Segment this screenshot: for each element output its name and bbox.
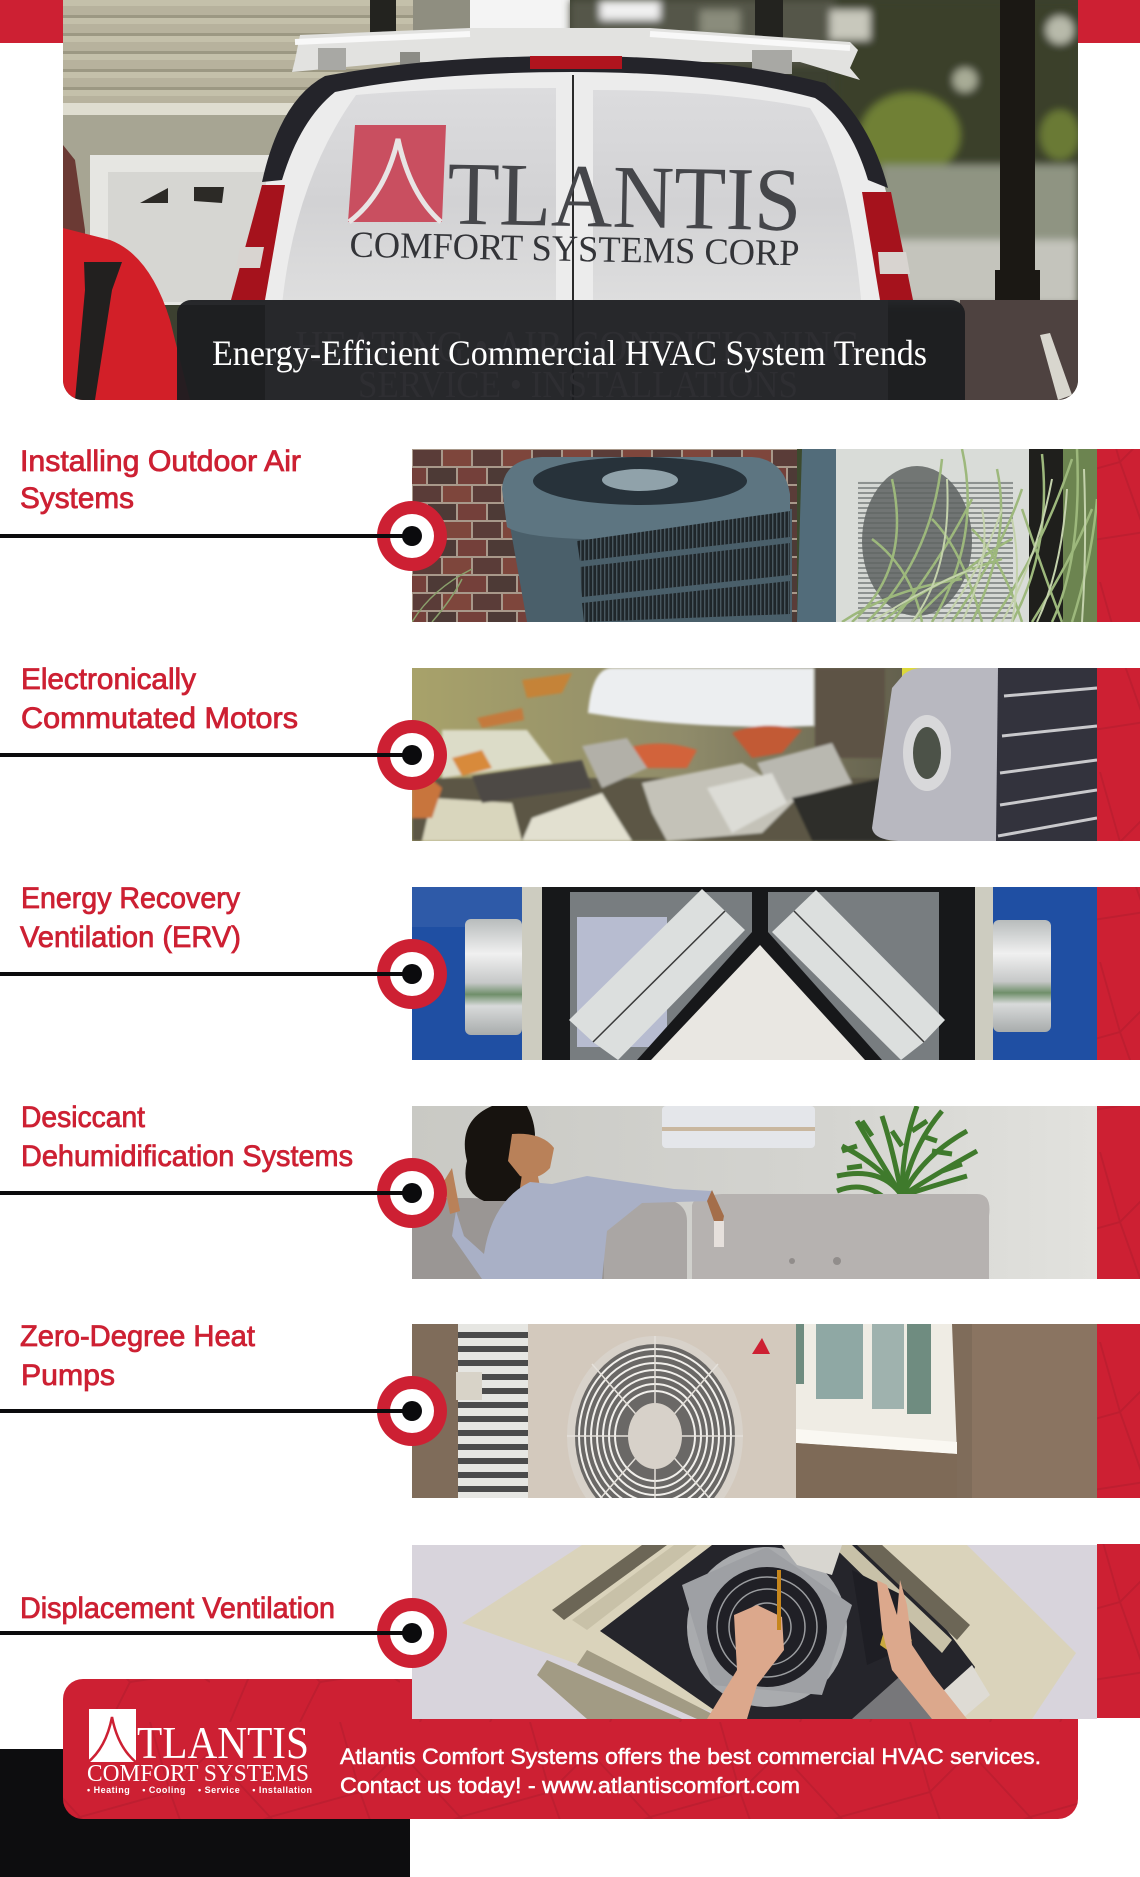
photo: ceiling cassette displacement ventilation	[412, 1545, 1097, 1719]
row 3 heading: Energy Recovery	[21, 882, 240, 915]
corner block: top right	[1078, 0, 1140, 43]
footer panel	[63, 1679, 1078, 1819]
photo: energy recovery ventilator	[412, 887, 1097, 1060]
row 3 connector and target	[0, 939, 447, 1009]
van lettering: TLANTIS	[447, 145, 802, 250]
woman	[444, 1106, 724, 1279]
row 4 heading	[21, 1101, 353, 1173]
title bar: SERVICE • INSTALLATIONS	[358, 364, 798, 406]
corner block: top left	[0, 0, 63, 43]
row 1 heading: Systems	[20, 482, 134, 515]
row 2 heading: Commutated Motors	[21, 702, 298, 735]
title bar: HEATING • AIR CONDITIONING	[295, 322, 860, 371]
row 6 connector and target	[0, 1598, 447, 1668]
van lettering	[351, 164, 798, 266]
red side strip: row 6	[1097, 1544, 1140, 1718]
row 4 connector and target	[0, 1158, 447, 1228]
footer message: Contact us today! - www.atlantiscomfort.com	[340, 1773, 800, 1798]
footer logo	[87, 1709, 312, 1795]
row 1 heading: Installing Outdoor Air	[20, 445, 301, 478]
fan grille	[567, 1336, 743, 1536]
row 2 connector and target	[0, 720, 447, 790]
row 6 heading: Displacement Ventilation	[20, 1592, 335, 1625]
footer black block	[0, 1749, 410, 1877]
footer message: Atlantis Comfort Systems offers the best commercial HVAC services.	[340, 1744, 1041, 1769]
row 3 heading	[20, 882, 241, 954]
red side strip: row 5	[1097, 1324, 1140, 1498]
row 4 heading: Dehumidification Systems	[21, 1140, 353, 1173]
row 1 heading	[20, 445, 301, 515]
plant	[837, 1106, 977, 1196]
row 5 heading	[20, 1320, 256, 1392]
red side strip: row 1	[1097, 449, 1140, 622]
row 3 heading: Ventilation (ERV)	[20, 921, 241, 954]
ladder rack	[292, 28, 860, 80]
footer message	[340, 1744, 1041, 1798]
footer logo: TLANTIS	[137, 1717, 309, 1768]
grass blades	[842, 449, 1097, 622]
arms	[707, 1580, 967, 1719]
red side strip: row 2	[1097, 668, 1140, 841]
hero photo: service van	[63, 0, 1080, 400]
photo: zero-degree heat pump	[412, 1324, 1097, 1498]
footer logo: COMFORT SYSTEMS	[87, 1761, 309, 1787]
row 4 heading: Desiccant	[21, 1101, 146, 1134]
photo: woman relaxing on sofa	[412, 1106, 1097, 1279]
van lettering: COMFORT SYSTEMS CORP	[349, 225, 800, 274]
title bar	[177, 300, 965, 406]
row 5 connector and target	[0, 1376, 447, 1446]
footer logo: • Heating • Cooling • Service • Installation	[87, 1785, 312, 1795]
photo: electronically commutated motors	[412, 668, 1097, 841]
photo: outdoor air units	[412, 449, 1097, 622]
red side strip: row 3	[1097, 887, 1140, 1060]
row 5 heading: Zero-Degree Heat	[20, 1320, 256, 1353]
row 2 heading	[21, 663, 298, 735]
red side strip: row 4	[1097, 1106, 1140, 1279]
row 2 heading: Electronically	[21, 663, 196, 696]
row 1 connector and target	[0, 501, 447, 571]
title: Energy-Efficient Commercial HVAC System Trends	[212, 333, 927, 373]
van logo mark	[348, 125, 446, 222]
row 5 heading: Pumps	[21, 1359, 115, 1392]
